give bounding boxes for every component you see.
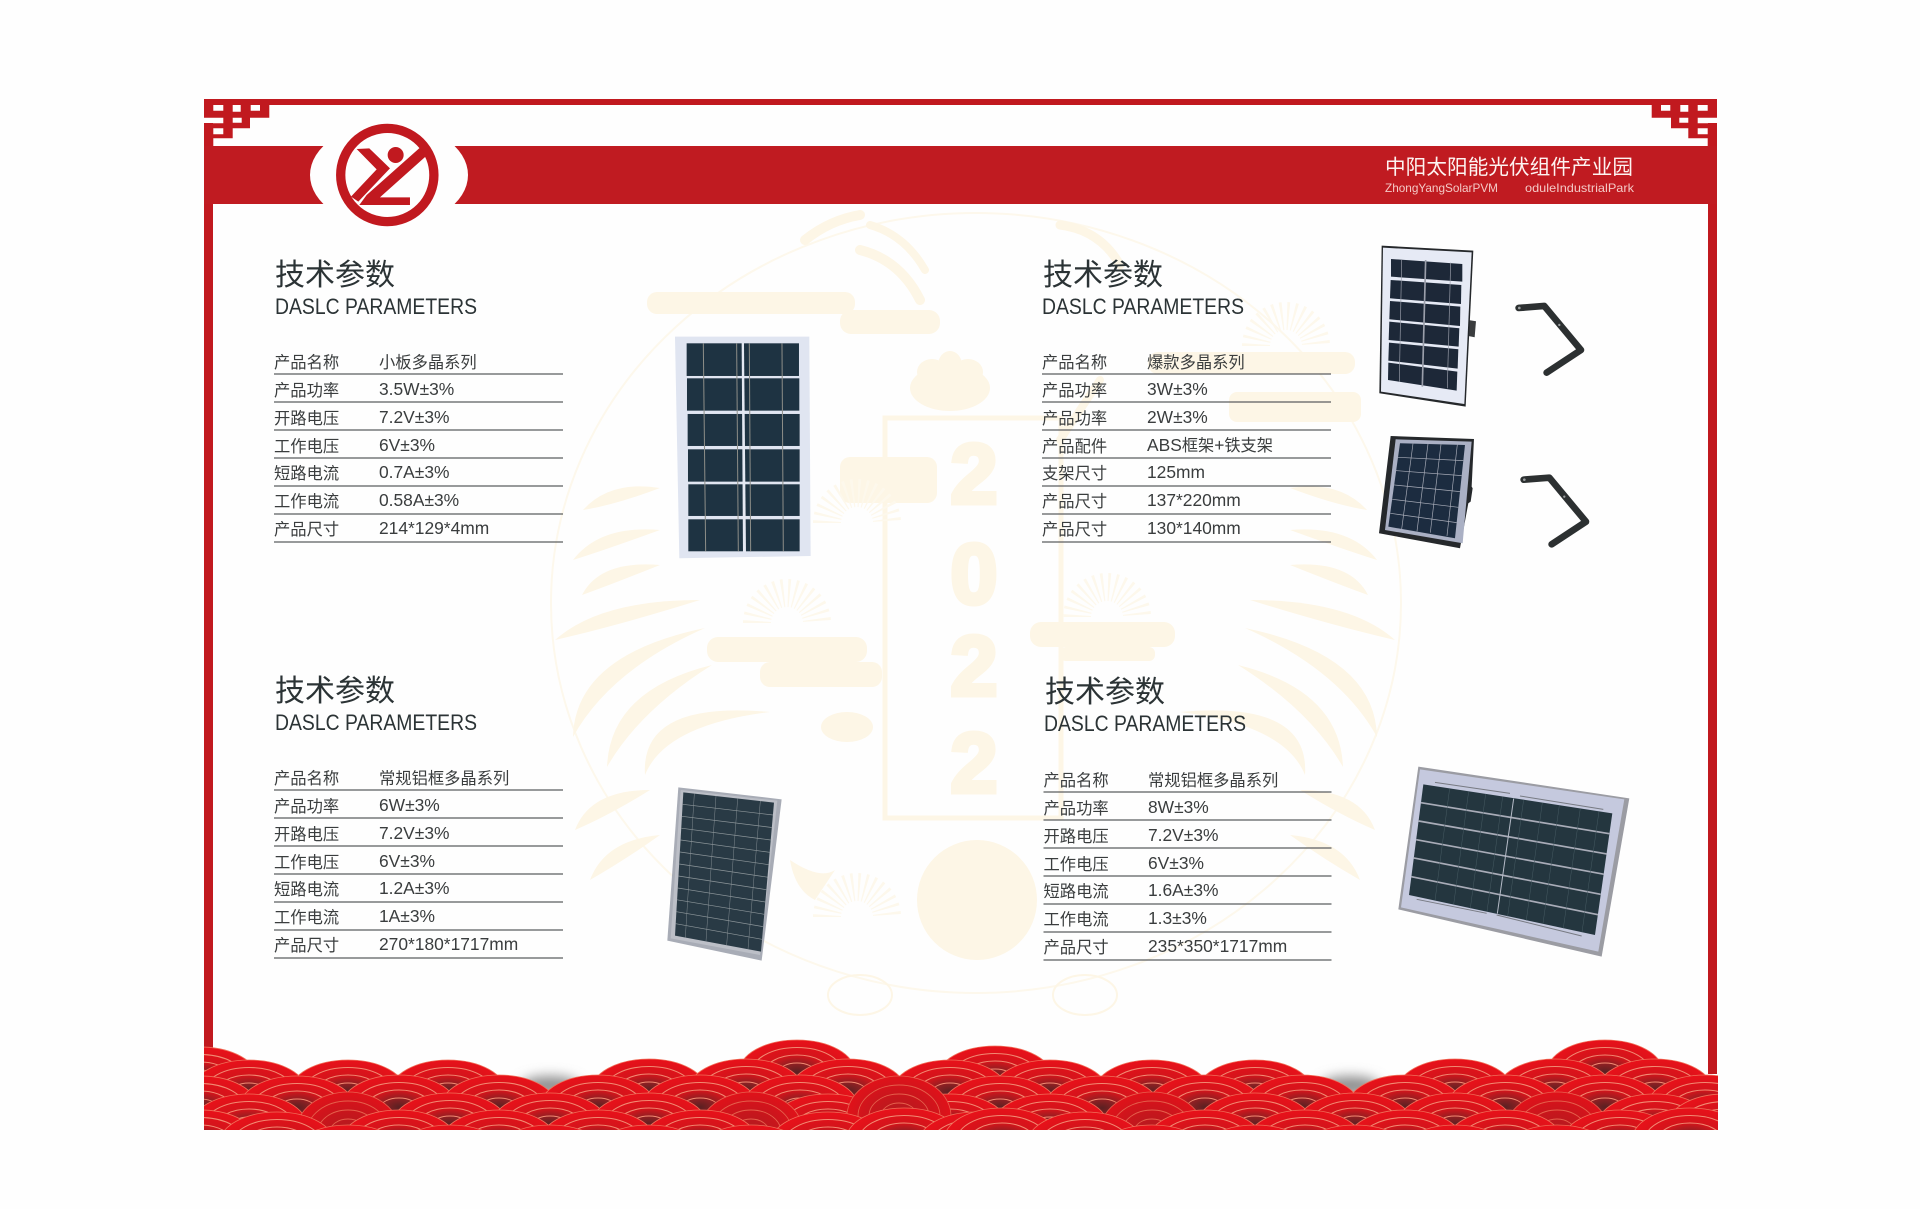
parameter table: 7.2V±3%	[379, 823, 449, 843]
solar panel image: small polycrystalline	[675, 337, 811, 558]
heading	[1044, 676, 1246, 736]
heading: 技术参数	[275, 259, 395, 292]
parameter table: 工作电压	[274, 854, 339, 872]
parameter table: 产品尺寸	[274, 937, 339, 955]
background watermark: tiger 2022 papercut: 2	[951, 716, 997, 810]
parameter table: 短路电流	[274, 881, 339, 899]
icon: mounting bracket lower	[1523, 478, 1586, 544]
parameter table: 产品功率	[274, 382, 339, 400]
parameter table: 开路电压	[274, 826, 339, 844]
parameter table: 工作电压	[1044, 856, 1109, 874]
parameter table: 214*129*4mm	[379, 518, 489, 538]
parameter table: 137*220mm	[1147, 490, 1241, 510]
parameter table: 常规铝框多晶系列	[1148, 772, 1278, 790]
parameter table: 2W±3%	[1147, 407, 1208, 427]
parameter table: 产品尺寸	[1044, 939, 1109, 957]
heading: DASLC PARAMETERS	[275, 294, 477, 319]
corner ornament right	[1652, 99, 1717, 146]
parameter table: 6V±3%	[1148, 853, 1204, 873]
parameter table: 产品功率	[274, 798, 339, 816]
panel: top right parameters	[1042, 246, 1586, 548]
solar panel image: ABS frame small	[1379, 436, 1474, 548]
background watermark: tiger 2022 papercut	[551, 213, 1401, 1015]
parameter table: 1.3±3%	[1148, 908, 1207, 928]
background watermark: tiger 2022 papercut: 2	[951, 619, 997, 713]
panel: top left parameters	[274, 259, 811, 558]
solar panel image: aluminium frame portrait	[667, 787, 782, 961]
corner ornament left	[204, 99, 269, 146]
parameter table: 短路电流	[1044, 883, 1109, 901]
header title: oduleIndustrialPark	[1525, 181, 1635, 195]
parameter table: 工作电压	[274, 438, 339, 456]
parameter table: 270*180*1717mm	[379, 934, 518, 954]
heading	[275, 259, 477, 319]
background watermark: tiger 2022 papercut: 2	[951, 427, 997, 521]
parameter table: 130*140mm	[1147, 518, 1241, 538]
parameter table: 产品尺寸	[274, 521, 339, 539]
parameter table: 3.5W±3%	[379, 379, 454, 399]
parameter table: 3W±3%	[1147, 379, 1208, 399]
parameter table: 产品名称	[274, 770, 339, 788]
parameter table: 0.58A±3%	[379, 490, 459, 510]
parameter table: 小板多晶系列	[379, 354, 477, 372]
parameter table: 125mm	[1147, 462, 1205, 482]
parameter table: 7.2V±3%	[379, 407, 449, 427]
panel: bottom right parameters	[1044, 676, 1629, 960]
parameter table: 支架尺寸	[1042, 465, 1107, 483]
header band	[204, 146, 1717, 204]
parameter table: 短路电流	[274, 465, 339, 483]
parameter table: 8W±3%	[1148, 797, 1209, 817]
parameter table: 6V±3%	[379, 435, 435, 455]
parameter table	[1044, 772, 1332, 960]
parameter table	[1042, 353, 1331, 542]
parameter table: 产品名称	[1042, 354, 1107, 372]
parameter table: 产品名称	[274, 354, 339, 372]
parameter table: 产品功率	[1042, 410, 1107, 428]
parameter table: 6W±3%	[379, 795, 440, 815]
heading: 技术参数	[1043, 259, 1163, 292]
solar panel image: aluminium frame landscape	[1398, 767, 1629, 957]
solar panel image: ABS frame large	[1379, 246, 1476, 407]
panel: bottom left parameters	[274, 675, 782, 961]
parameter table: 235*350*1717mm	[1148, 936, 1287, 956]
heading: DASLC PARAMETERS	[1042, 294, 1244, 319]
parameter table: 7.2V±3%	[1148, 825, 1218, 845]
parameter table: 产品名称	[1044, 772, 1109, 790]
parameter table	[274, 770, 563, 958]
parameter table: 产品功率	[1042, 382, 1107, 400]
heading	[1042, 259, 1244, 319]
parameter table: 1.6A±3%	[1148, 880, 1218, 900]
parameter table: ABS框架+铁支架	[1147, 435, 1273, 455]
parameter table: 开路电压	[1044, 828, 1109, 846]
parameter table: 产品尺寸	[1042, 521, 1107, 539]
parameter table: 常规铝框多晶系列	[379, 770, 509, 788]
heading	[275, 675, 477, 735]
parameter table: 1.2A±3%	[379, 878, 449, 898]
parameter table: 产品功率	[1044, 800, 1109, 818]
parameter table: 6V±3%	[379, 851, 435, 871]
parameter table: 爆款多晶系列	[1147, 353, 1245, 372]
parameter table: 1A±3%	[379, 906, 435, 926]
heading: 技术参数	[1045, 676, 1165, 709]
parameter table: 0.7A±3%	[379, 462, 449, 482]
heading: 技术参数	[275, 675, 395, 708]
parameter table: 工作电流	[1044, 911, 1109, 929]
parameter table	[274, 354, 563, 542]
parameter table: 工作电流	[274, 493, 339, 511]
heading: DASLC PARAMETERS	[275, 710, 477, 735]
header title: ZhongYangSolarPVM	[1385, 181, 1498, 195]
logo	[310, 123, 468, 232]
parameter table: 工作电流	[274, 909, 339, 927]
background watermark: tiger 2022 papercut: 0	[951, 527, 997, 621]
parameter table: 产品配件	[1042, 438, 1107, 456]
header title	[1385, 150, 1635, 195]
icon: mounting bracket upper	[1518, 306, 1581, 373]
decorative wave of red scallop clouds	[204, 1040, 1718, 1130]
parameter table: 开路电压	[274, 410, 339, 428]
parameter table: 产品尺寸	[1042, 493, 1107, 511]
red frame with header band	[204, 99, 1717, 1074]
heading: DASLC PARAMETERS	[1044, 711, 1246, 736]
header title: 中阳太阳能光伏组件产业园	[1385, 150, 1633, 180]
